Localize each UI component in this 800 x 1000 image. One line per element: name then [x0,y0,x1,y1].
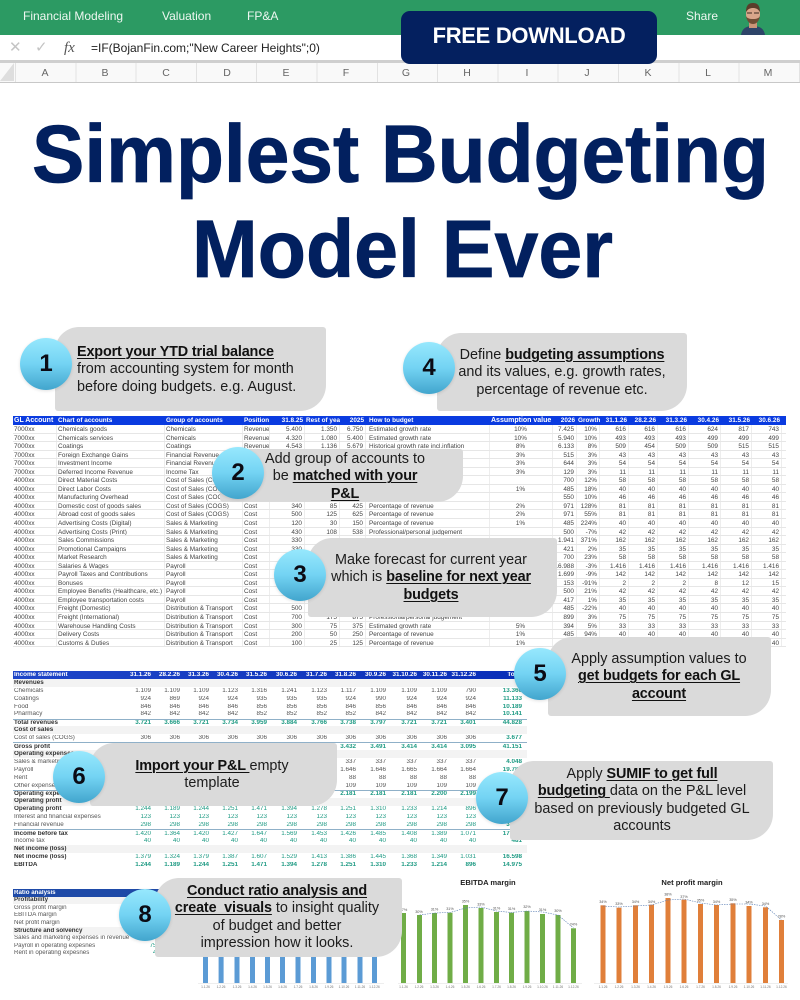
chart: EBITDA margin: 30% [554,909,562,913]
chart: EBITDA margin: 37% [400,908,408,912]
spreadsheet column headers: E [282,67,290,79]
chart: EBITDA margin: 1.4.26 [446,985,455,989]
icon: confirm check: ✓ [35,39,48,56]
chart: net profit margin: 1.1.26 [599,985,608,989]
chart: EBITDA margin: 1.9.26 [523,985,532,989]
callout 7 text: Apply SUMIF to get full [567,766,717,782]
step number 7 [476,772,528,824]
callout 8 text [174,882,379,951]
chart: net profit margin: 1.11.26 [760,985,771,989]
callout 7 text: budgeting data on the P&L level [538,783,746,799]
callout 4: define assumptions [402,333,687,411]
spreadsheet column headers: B [101,67,108,79]
excel ribbon header [0,0,800,35]
table header row: GL Account [14,417,53,424]
chart: EBITDA margin: 31% [431,908,439,912]
chart: net profit margin: 34% [648,900,656,904]
callout 7: apply SUMIF [475,761,773,840]
callout 2 text: P&L [331,486,359,502]
chart: EBITDA margin: 35% [462,900,470,904]
callout 7 text: based on previously budgeted GL [534,801,750,817]
spreadsheet column headers: J [584,67,590,79]
chart: EBITDA margin: 31% [493,906,501,910]
icon: cancel cross: ✕ [9,39,22,56]
callout 6 text: Import your P&L empty [135,758,289,774]
callout 8: ratio analysis and visuals [118,878,402,957]
callout 5 text: get budgets for each GL [578,668,740,684]
chart: EBITDA margin: 1.8.26 [507,985,516,989]
step number 2: 2 [231,459,245,486]
spreadsheet column headers: H [463,67,471,79]
free download button [401,11,657,64]
callout 3: forecast current year [273,538,557,617]
title: Model Ever [192,204,613,295]
callout 1 text: from accounting system for month [77,361,294,377]
step number 1: 1 [39,350,53,377]
callout 3 text: budgets [404,587,458,603]
free download button: FREE DOWNLOAD [433,23,625,48]
spreadsheet column headers: L [705,67,711,79]
chart: net profit margin: 1.12.26 [776,985,787,989]
chart: EBITDA margin: 32% [523,905,531,909]
spreadsheet column headers: K [644,67,652,79]
chart: net profit margin: 1.4.26 [647,985,656,989]
title: Simplest Budgeting [32,109,769,200]
chart: net profit margin: 1.8.26 [712,985,721,989]
chart: gross margin bars (blue): 1.10.26 [339,985,350,989]
chart: net profit margin: 34% [632,900,640,904]
chart: gross margin bars (blue): 1.3.26 [233,985,242,989]
callout 2 text: be matched with your [273,468,417,484]
title [32,109,769,295]
chart: net profit margin: 37% [680,895,688,899]
chart: net profit margin: 1.7.26 [696,985,705,989]
chart: EBITDA margin: 1.2.26 [415,985,424,989]
table header row: 28.2.26 [635,417,656,424]
chart: net profit margin [594,878,788,989]
chart: net profit margin: 1.5.26 [664,985,673,989]
chart: net profit margin: 1.9.26 [729,985,738,989]
callout 8 text: Conduct ratio analysis and [187,882,367,898]
chart: EBITDA margin: 31% [539,908,547,912]
chart: gross margin bars (blue): 1.5.26 [263,985,272,989]
table header row: Group of accounts [166,417,223,424]
chart: EBITDA margin: 1.6.26 [477,985,486,989]
chart: gross margin bars (blue): 1.1.26 [201,985,210,989]
ratio analysis header row [13,889,168,897]
chart: gross margin bars (blue) [198,956,384,989]
chart: gross margin bars (blue): 1.8.26 [309,985,318,989]
chart: EBITDA margin: 31% [508,907,516,911]
formula text: =IF(BojanFin.com;"New Career Heights";0) [91,41,320,55]
table header row: 30.6.26 [759,417,780,424]
table header row: Growth [578,417,600,424]
table header row: Chart of accounts [58,417,112,424]
chart: EBITDA margin: 30% [415,910,423,914]
chart: net profit margin: 1.2.26 [615,985,624,989]
ratio analysis table [13,889,162,956]
table header row: Position [244,417,269,424]
table header row: 31.5.26 [729,417,750,424]
chart: EBITDA margin: 1.12.26 [568,985,579,989]
spreadsheet column headers: C [162,67,170,79]
chart: net profit margin: 1.10.26 [744,985,755,989]
trial balance budgeting table [13,416,786,647]
spreadsheet column headers: I [526,67,528,79]
chart: EBITDA margin: 1.1.26 [399,985,408,989]
formula bar [0,35,800,60]
menu: FP&A: FP&A [247,9,278,23]
chart: EBITDA margin: 1.5.26 [461,985,470,989]
spreadsheet column headers: G [402,67,410,79]
menu: Financial Modeling: Financial Modeling [23,9,123,23]
step number 5: 5 [533,660,547,687]
chart: net profit margin: 35% [729,898,737,902]
spreadsheet column headers: A [41,67,48,79]
callout 3 text [331,552,531,603]
step number 4: 4 [422,354,436,381]
chart: gross margin bars (blue): 1.4.26 [248,985,257,989]
chart: gross margin bars (blue): 1.6.26 [278,985,287,989]
chart: EBITDA margin: 1.7.26 [492,985,501,989]
callout 8 text: of budget and better [213,918,341,934]
callout 5 text [571,650,747,702]
chart: EBITDA margin: 1.10.26 [537,985,548,989]
step number 5 [514,648,566,700]
chart: net profit margin: 1.6.26 [680,985,689,989]
spreadsheet column headers: M [764,67,772,79]
table header row: Assumption value [491,417,551,424]
chart: gross margin bars (blue): 1.12.26 [369,985,380,989]
callout 3 text: Make forecast for current year [335,552,527,568]
chart: net profit margin: 34% [599,900,607,904]
table header row: 2025 [350,417,364,424]
chart: net profit margin: 1.3.26 [631,985,640,989]
chart: EBITDA margin: 1.11.26 [553,985,563,989]
spreadsheet column headers: F [343,67,349,79]
spreadsheet column headers: D [223,67,231,79]
income statement table [13,671,527,868]
chart: gross margin bars (blue): 1.2.26 [217,985,226,989]
income statement header row [13,671,527,679]
chart: EBITDA margin: 31% [446,907,454,911]
chart: net profit margin: 34% [745,900,753,904]
callout 4 text: and its values, e.g. growth rates, [458,364,666,380]
chart: net profit margin: 35% [697,898,705,902]
callout 1 text: Export your YTD trial balance [77,344,274,360]
callout 2 text: Add group of accounts to [265,450,425,466]
chart: gross margin bars (blue): 1.9.26 [325,985,334,989]
callout 1: export trial balance [19,327,326,411]
EBITDA chart title: EBITDA margin [460,878,516,887]
callout 3 text: which is baseline for next year [331,569,531,585]
callout 7 text [534,766,750,834]
chart: net profit margin: 33% [615,902,623,906]
callout 7 text: accounts [613,818,671,834]
table header row: 31.8.25 [282,417,303,424]
callout 4 text: Define budgeting assumptions [460,346,664,362]
chart: net profit margin: 34% [762,902,770,906]
callout 6 text [135,758,289,791]
step number 3: 3 [293,561,307,588]
callout 8 text: create visuals to insight quality [175,900,379,916]
chart: EBITDA margin: 1.3.26 [430,985,439,989]
step number 3 [274,549,326,601]
chart: EBITDA margin [398,878,582,989]
callout 6 text: template [184,775,240,791]
callout 5: apply assumption values [513,637,771,716]
chart: gross margin bars (blue): 1.11.26 [355,985,365,989]
menu: Valuation: Valuation [162,9,211,23]
callout 5 text: Apply assumption values to [571,650,747,666]
step number 8 [119,889,171,941]
callout 4 text [458,346,666,398]
step number 6: 6 [72,763,86,790]
callout 2 text [265,450,425,502]
table header row: 31.3.26 [666,417,687,424]
step number 7: 7 [495,784,509,811]
step number 2 [212,447,264,499]
chart: EBITDA margin: 33% [477,902,485,906]
table header row: How to budget [369,417,413,424]
callout 1 text [77,344,296,395]
step number 1 [20,338,72,390]
step number 8: 8 [138,901,152,928]
spreadsheet column headers [0,63,800,83]
table header row: 31.1.26 [606,417,627,424]
callout 8 text: impression how it looks. [201,935,353,951]
table header row [13,416,786,425]
icon: fx: fx [64,40,75,56]
net profit chart title: Net profit margin [661,878,723,887]
chart: net profit margin: 28% [778,914,786,918]
table header row: 30.4.26 [698,417,719,424]
menu: Share: Share [686,9,718,23]
step number 4 [403,342,455,394]
avatar portrait [741,3,765,35]
callout 5 text: account [632,686,686,702]
chart: EBITDA margin: 24% [570,922,578,926]
table header row: 2026 [561,417,575,424]
step number 6 [53,751,105,803]
callout 2: match accounts [211,447,463,502]
callout 1 text: before doing budgets. e.g. August. [77,379,296,395]
chart: net profit margin: 34% [713,900,721,904]
chart: net profit margin: 38% [664,892,672,896]
callout 6: import P&L template [52,743,337,806]
callout 4 text: percentage of revenue etc. [476,382,648,398]
chart: gross margin bars (blue): 1.7.26 [294,985,303,989]
